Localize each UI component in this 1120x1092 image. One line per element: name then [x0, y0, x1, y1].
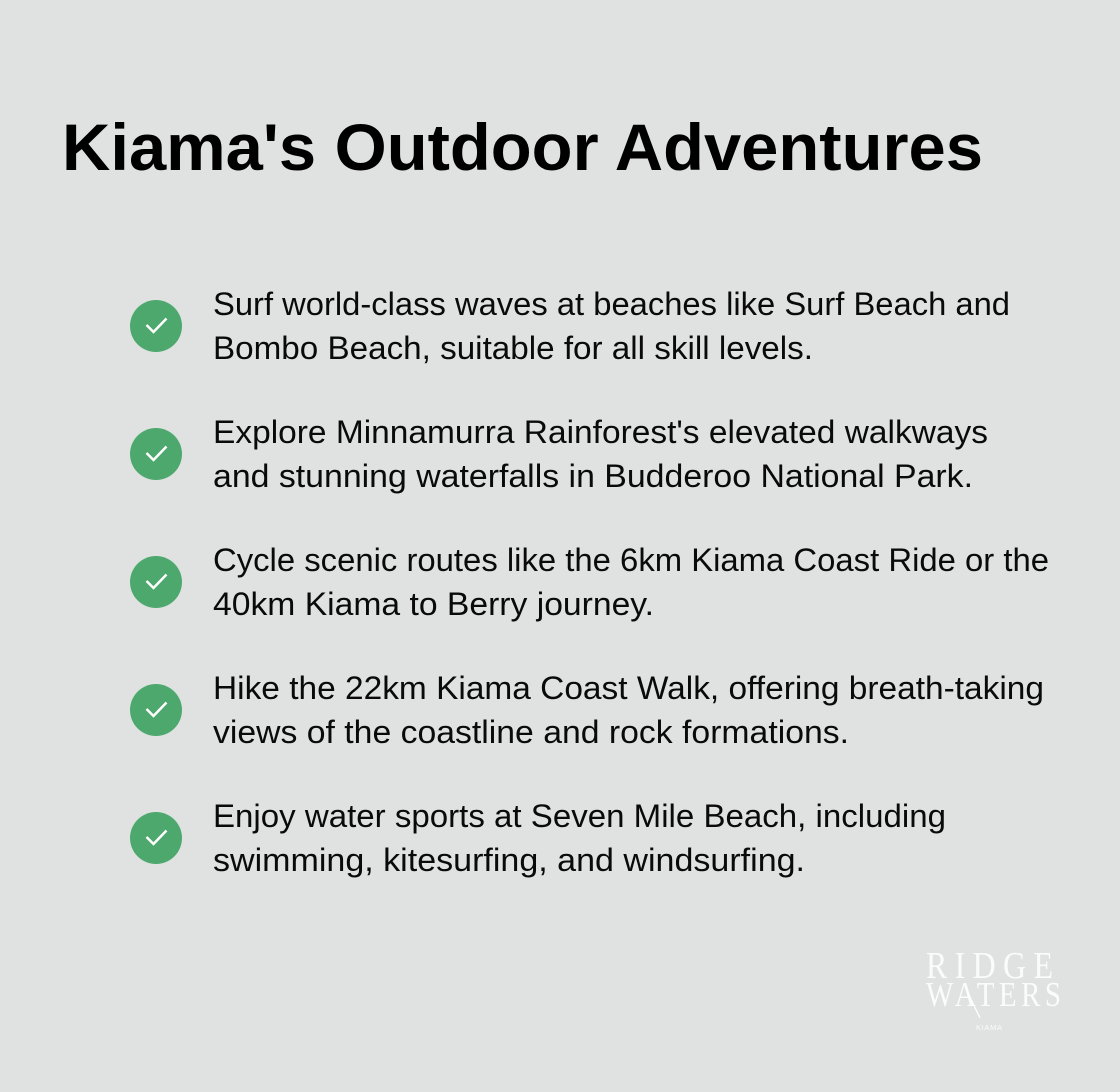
logo: Ridge Waters Kiama: WATERS [926, 974, 1061, 1014]
text: water sports: swimming, kitesurfing, and windsurfing. [213, 842, 805, 878]
list item: surfing [130, 286, 1010, 366]
icon: check badge [130, 684, 182, 736]
list item: cycling [130, 542, 1049, 622]
icon: check badge [130, 428, 182, 480]
text: rainforest: Explore Minnamurra Rainforest's elevated walkways [213, 414, 988, 450]
text: cycling: Cycle scenic routes like the 6km Kiama Coast Ride or the [213, 542, 1049, 578]
logo: Ridge Waters Kiama: RIDGE [926, 944, 1053, 987]
icon: check badge [130, 812, 182, 864]
logo: Ridge Waters Kiama: KIAMA [976, 1023, 1002, 1032]
text: surfing: Bombo Beach, suitable for all skill levels. [213, 330, 813, 366]
text: water sports [213, 798, 946, 878]
text: rainforest [213, 414, 988, 494]
list item: hiking [130, 670, 1044, 750]
text: rainforest: and stunning waterfalls in Budderoo National Park. [213, 458, 973, 494]
text: hiking [213, 670, 1044, 750]
text: cycling [213, 542, 1049, 622]
list item: rainforest [130, 414, 988, 494]
title: Kiama's Outdoor Adventures [62, 110, 983, 184]
icon: check badge [130, 556, 182, 608]
icon: check badge [130, 300, 182, 352]
logo: Ridge Waters Kiama [926, 944, 1061, 1032]
text: surfing [213, 286, 1010, 366]
text: cycling: 40km Kiama to Berry journey. [213, 586, 654, 622]
text: surfing: Surf world-class waves at beaches like Surf Beach and [213, 286, 1010, 322]
list item: water sports [130, 798, 946, 878]
text: hiking: Hike the 22km Kiama Coast Walk, offering breath-taking [213, 670, 1044, 706]
text: hiking: views of the coastline and rock formations. [213, 714, 849, 750]
text: water sports: Enjoy water sports at Seven Mile Beach, including [213, 798, 946, 834]
